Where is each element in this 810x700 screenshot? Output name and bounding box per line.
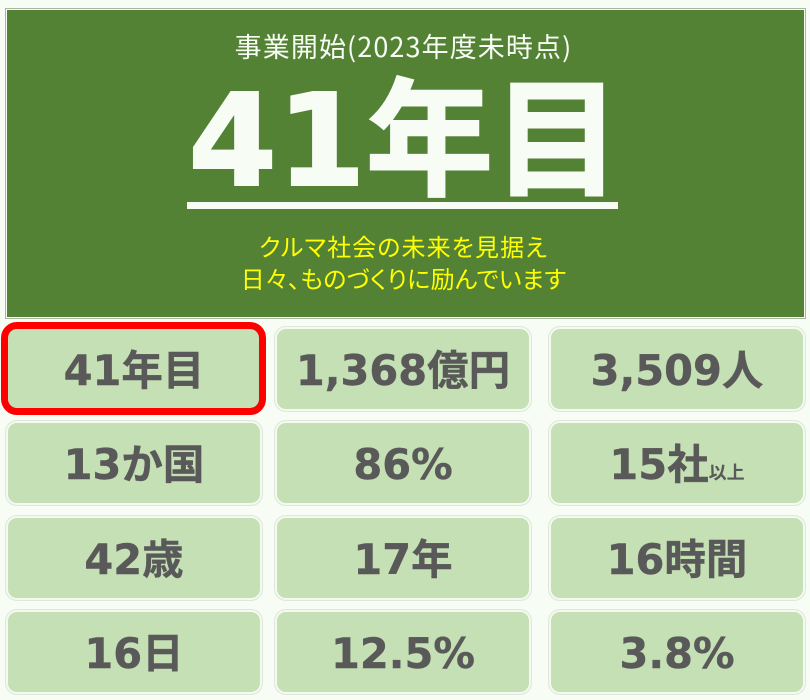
card: 41年目 <box>6 327 262 411</box>
card: 3.8% <box>549 610 805 694</box>
hero caption: 事業開始(2023年度未時点) <box>235 26 572 65</box>
card: 15社以上: 15社以上 <box>609 440 745 489</box>
card: 1,368億円 <box>275 327 531 411</box>
hero message: 日々、ものづくりに励んでいます <box>241 260 566 295</box>
card: 41年目: 41年目 <box>64 346 204 395</box>
card: 17年 <box>275 516 531 600</box>
panel: hero <box>5 8 806 319</box>
card: 42歳 <box>6 516 262 600</box>
card: 13か国 <box>6 421 262 505</box>
hero message: クルマ社会の未来を見据え <box>259 228 548 263</box>
card: 3.8%: 3.8% <box>619 629 735 678</box>
hero message <box>241 228 566 295</box>
card: 16日 <box>6 610 262 694</box>
hero big number: 41年目 <box>188 68 621 216</box>
card: 42歳: 42歳 <box>84 535 184 584</box>
card: 3,509人: 3,509人 <box>591 346 763 395</box>
selection highlight <box>1 322 266 415</box>
card: 16時間: 16時間 <box>607 535 747 584</box>
card: 16時間 <box>549 516 805 600</box>
card: 86%: 86% <box>353 440 453 489</box>
card: 3,509人 <box>549 327 805 411</box>
card: 86% <box>275 421 531 505</box>
card: 17年: 17年 <box>353 535 453 584</box>
card: 15社以上 <box>549 421 805 505</box>
card: 12.5% <box>275 610 531 694</box>
card: 16日: 16日 <box>84 629 184 678</box>
card: 13か国: 13か国 <box>64 440 204 489</box>
card: 1,368億円: 1,368億円 <box>296 346 510 395</box>
card: 12.5%: 12.5% <box>331 629 475 678</box>
hero underline <box>187 202 618 209</box>
